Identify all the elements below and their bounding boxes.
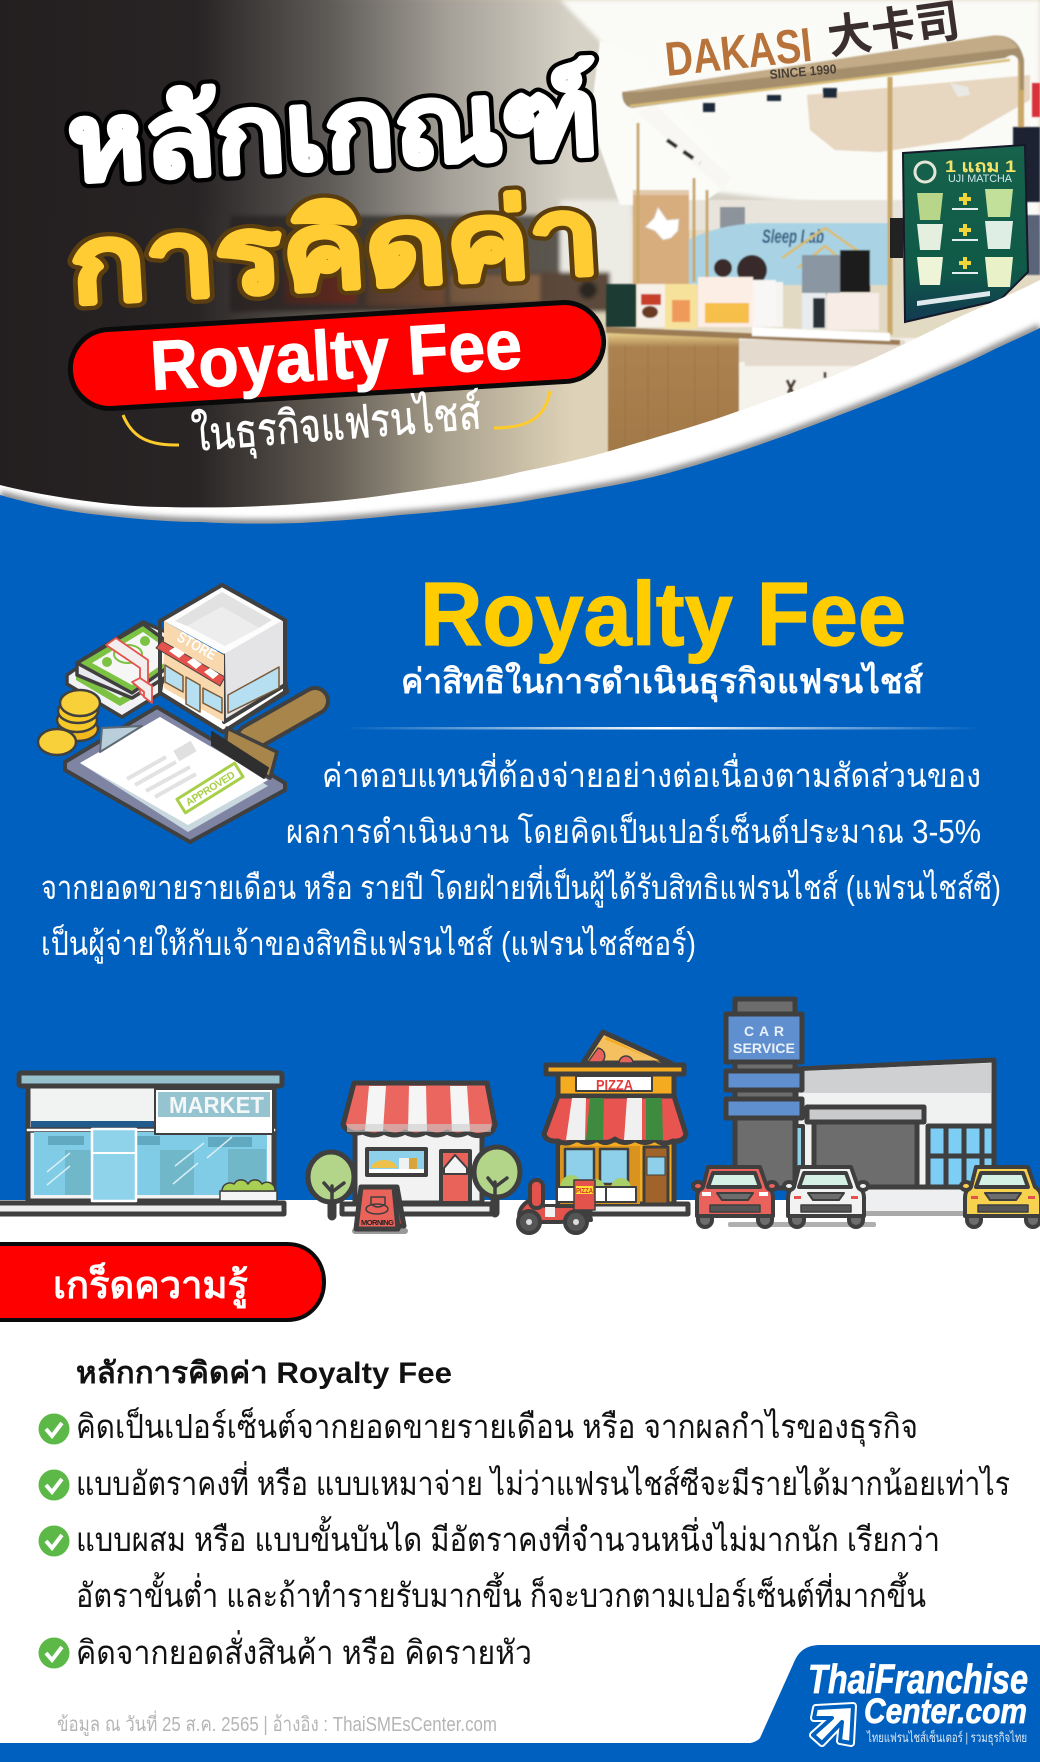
digital menu screen: [890, 145, 1028, 322]
illustration: store block: [156, 585, 287, 732]
item 3: อัตราขั้นต่ำ และถ้าทำรายรับมากขึ้น ก็จะบวกตามเปอร์เซ็นต์ที่มากขึ้น: [76, 1572, 926, 1614]
item 3: แบบผสม หรือ แบบขั้นบันได มีอัตราคงที่จำนวนหนึ่งไม่มากนัก เรียกว่า: [76, 1516, 940, 1558]
title: หลักเกณฑ์: หลักเกณฑ์: [65, 55, 600, 204]
title: การคิดค่า: การคิดค่า: [66, 175, 602, 326]
brand sign: DAKASI: SINCE 1990: [769, 61, 837, 82]
item 3: [38, 1516, 940, 1614]
illustration: car service building: C A R: [744, 1023, 784, 1039]
subtitle with yellow brackets: ในธุรกิจแฟรนไชส์: [190, 386, 483, 464]
illustration: money stack: [67, 622, 190, 717]
subheading: ค่าสิทธิในการดำเนินธุรกิจแฟรนไชส์: [401, 661, 923, 703]
title: หลักเกณฑ์: หลักเกณฑ์: [65, 55, 600, 204]
dark fade overlay: [0, 0, 552, 508]
title pill: Royalty Fee: [68, 300, 606, 411]
illustration: white car: [784, 1167, 868, 1227]
illustration: pizza shop: [544, 1032, 688, 1214]
item 4: คิดจากยอดสั่งสินค้า หรือ คิดรายหัว: [76, 1630, 532, 1671]
illustration: morning sign: [352, 1187, 408, 1234]
definition paragraph: ค่าตอบแทนที่ต้องจ่ายอย่างต่อเนื่องตามสัดส่วนของ: [322, 753, 981, 794]
illustration: coffee shop: [308, 1083, 520, 1234]
brand sign: DAKASI: DAKASI: [663, 19, 814, 87]
digital menu screen: UJI MATCHA: [948, 173, 1013, 185]
source note: ข้อมูล ณ วันที่ 25 ส.ค. 2565 | อ้างอิง : ThaiSMEsCenter.com: [57, 1710, 497, 1737]
definition paragraph: ผลการดำเนินงาน โดยคิดเป็นเปอร์เซ็นต์ประมาณ 3-5%: [286, 812, 981, 850]
title: การคิดค่า: การคิดค่า: [66, 175, 602, 326]
illustration: car service building: SERVICE: [733, 1040, 795, 1056]
illustration: stamp: [212, 701, 315, 778]
heading: Royalty Fee: Royalty Fee: [420, 565, 906, 665]
logo: ThaiFranchise Center.com: [740, 1645, 1040, 1746]
illustration: clipboard: [65, 707, 285, 842]
digital menu screen: 1 แถม 1: [945, 157, 1016, 176]
heading: หลักการคิดค่า Royalty Fee: หลักการคิดค่า Royalty Fee: [76, 1357, 452, 1390]
section tag: เกร็ดความรู้: เกร็ดความรู้: [53, 1262, 249, 1309]
illustration: coins: [38, 690, 100, 755]
title pill: Royalty Fee: Royalty Fee: [148, 305, 524, 405]
illustration: market: MARKET: [169, 1092, 264, 1118]
item 1: คิดเป็นเปอร์เซ็นต์จากยอดขายรายเดือน หรือ จากผลกำไรของธุรกิจ: [76, 1407, 918, 1447]
icon: logo arrow: [813, 1706, 853, 1743]
illustration: clipboard: APPROVED: [184, 769, 238, 809]
definition paragraph: เป็นผู้จ่ายให้กับเจ้าของสิทธิแฟรนไชส์ (แฟรนไชส์ซอร์): [41, 924, 696, 964]
illustration: store block: STORE: [174, 629, 219, 664]
illustration: market: [0, 1073, 284, 1214]
section tag: เกร็ดความรู้: [0, 1244, 324, 1320]
blue background panel: [0, 328, 1040, 1200]
divider: [345, 727, 981, 730]
hero photo: franchise shop: Sleep Lab: [762, 227, 824, 248]
illustration: car service building: [726, 999, 994, 1227]
brand sign: DAKASI: [666, 0, 958, 79]
definition paragraph: [41, 753, 1001, 964]
illustration: yellow car: [961, 1167, 1040, 1227]
hero photo: franchise shop: [0, 0, 1040, 512]
illustration: morning sign: MORNING: [361, 1218, 394, 1227]
illustration: red car: [693, 1167, 777, 1227]
illustration: scooter: PIZZA: [576, 1186, 593, 1195]
illustration: pizza shop: PIZZA: [596, 1077, 633, 1094]
checklist: [38, 1407, 1010, 1671]
illustration: trees: [308, 1147, 520, 1216]
swoosh shadow: [0, 328, 1040, 524]
bottom blue bar: [0, 1743, 1040, 1762]
illustration: scooter: [518, 1180, 595, 1233]
icon: isometric store, cash, coins, approved clipboard: [38, 585, 315, 842]
